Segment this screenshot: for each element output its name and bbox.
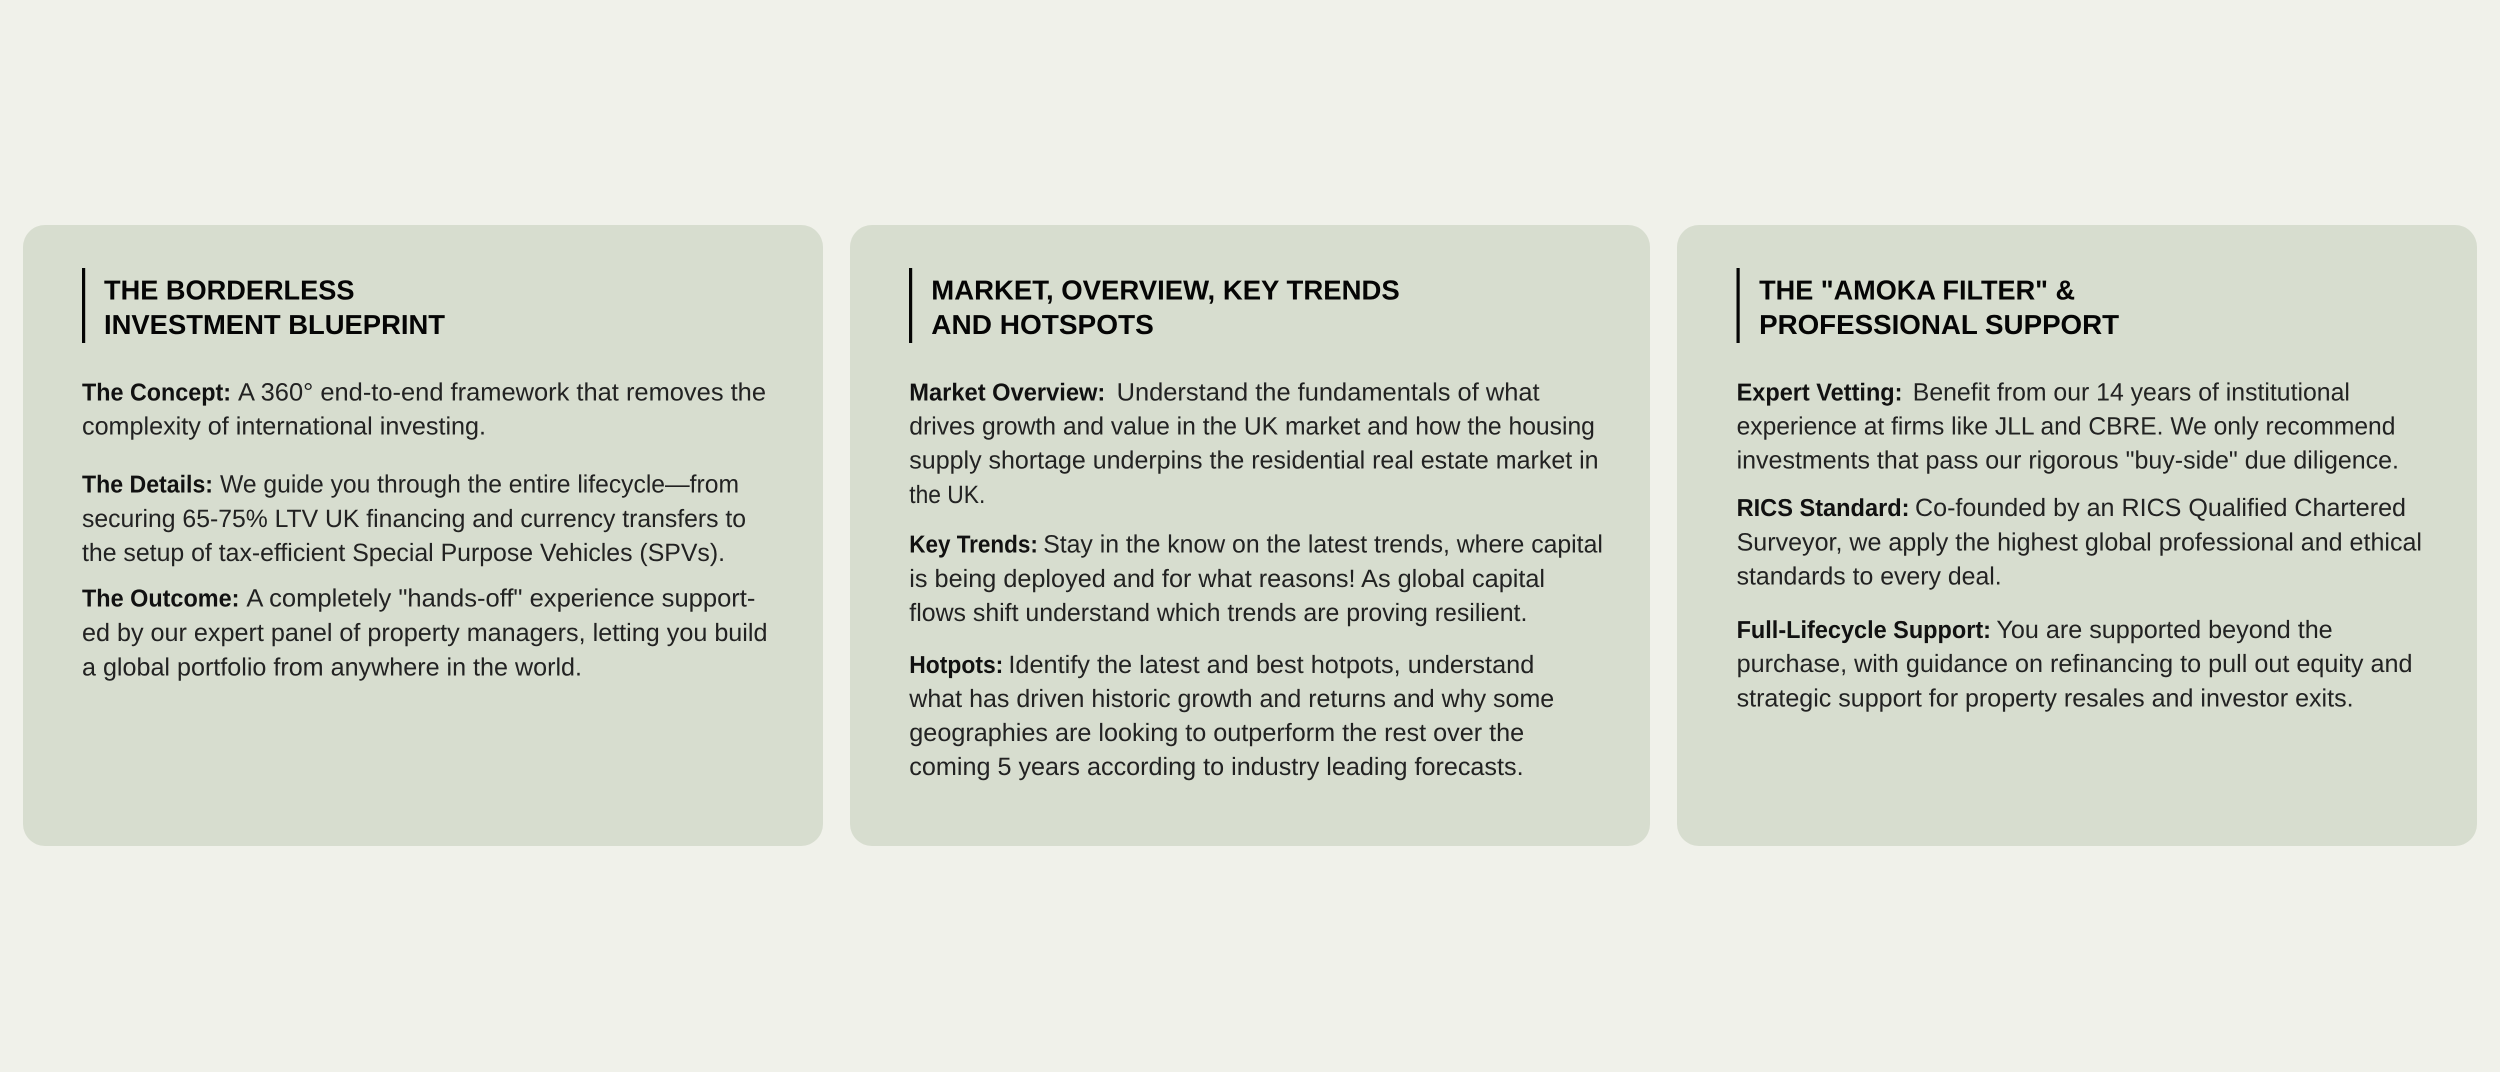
text block: full-lifecycle support: You are supported beyond the — [1996, 616, 2333, 644]
text block: the outcome: The Outcome: — [82, 586, 239, 613]
text block: full-lifecycle support: purchase, with guidance on refinancing to pull out equity and — [1737, 650, 2412, 678]
text block: the details — [82, 471, 746, 567]
text block: hotspots: what has driven historic growth and returns and why some — [908, 685, 1554, 713]
text block: hotspots: coming 5 years according to industry leading forecasts. — [909, 753, 1524, 781]
text block: the outcome: a global portfolio from anywhere in the world. — [82, 653, 582, 681]
text block: market overview: Market Overview: — [909, 379, 1105, 406]
text block: rics standard: standards to every deal. — [1737, 563, 2002, 591]
text block: rics standard — [1737, 494, 2422, 591]
text block: hotspots: geographies are looking to outperform the rest over the — [909, 719, 1524, 747]
text block: key trends: Stay in the know on the latest trends, where capital — [1043, 531, 1603, 559]
text block: the outcome: A completely "hands-off" experience support- — [246, 585, 755, 613]
heading: market, overview, key trends and hotspots: AND HOTSPOTS — [931, 309, 1154, 340]
text block: the concept: The Concept: — [82, 379, 231, 406]
heading: the borderless investment blueprint — [82, 268, 445, 343]
panel: borderless investment blueprint — [23, 225, 823, 846]
text block: hotspots — [908, 651, 1554, 781]
text block: market overview: the UK. — [909, 481, 985, 509]
text block: the details: securing 65-75% LTV UK financing and currency transfers to — [82, 505, 746, 533]
text block: rics standard: RICS Standard: — [1737, 495, 1910, 522]
text block: rics standard: Co-founded by an RICS Qualified Chartered — [1915, 494, 2406, 522]
text block: market overview — [909, 378, 1599, 509]
text block: the details: The Details: — [82, 472, 213, 499]
text block: key trends: flows shift understand which trends are proving resilient. — [909, 599, 1527, 627]
text block: the details: We guide you through the entire lifecycle—from — [220, 471, 739, 499]
text block: the details: the setup of tax-efficient Special Purpose Vehicles (SPVs). — [82, 539, 725, 567]
heading: the borderless investment blueprint: THE BORDERLESS — [104, 275, 354, 306]
text block: market overview: supply shortage underpins the residential real estate market in — [909, 446, 1599, 474]
text block: the concept — [82, 378, 766, 440]
text block: full-lifecycle support: strategic support for property resales and investor exits. — [1737, 684, 2354, 712]
text block: the outcome: ed by our expert panel of property managers, letting you build — [82, 619, 768, 647]
text block: the concept: A 360° end-to-end framework that removes the — [238, 378, 766, 406]
heading: the amoka filter and professional support — [1736, 268, 2119, 343]
heading: the borderless investment blueprint: INVESTMENT BLUEPRINT — [104, 309, 445, 340]
text block: rics standard: Surveyor, we apply the highest global professional and ethical — [1737, 529, 2422, 557]
panel: market overview, key trends and hotspots — [850, 225, 1650, 846]
heading: the amoka filter and professional support: THE "AMOKA FILTER" & — [1759, 275, 2075, 306]
text block: market overview: Understand the fundamentals of what — [1117, 378, 1540, 406]
text block: expert vetting: Benefit from our 14 years of institutional — [1913, 378, 2350, 406]
text block: hotspots: Identify the latest and best hotpots, understand — [1008, 651, 1534, 679]
text block: expert vetting: experience at firms like JLL and CBRE. We only recommend — [1737, 412, 2395, 440]
text block: key trends — [909, 531, 1603, 627]
text block: expert vetting: investments that pass our rigorous "buy-side" due diligence. — [1737, 446, 2399, 474]
heading: market, overview, key trends and hotspots: MARKET, OVERVIEW, KEY TRENDS — [931, 275, 1400, 306]
text block: key trends: is being deployed and for what reasons! As global capital — [909, 565, 1545, 593]
panel: the amoka filter and professional support — [1677, 225, 2477, 846]
text block: the concept: complexity of international investing. — [82, 412, 486, 440]
text block: the outcome — [82, 585, 768, 681]
text block: expert vetting — [1737, 378, 2399, 474]
text block: expert vetting: Expert Vetting: — [1737, 379, 1902, 406]
text block: full-lifecycle support: Full-Lifecycle Support: — [1737, 617, 1991, 644]
heading: market, overview, key trends and hotspots — [909, 268, 1400, 343]
text block: hotspots: Hotpots: — [909, 652, 1003, 679]
heading: the amoka filter and professional support: PROFESSIONAL SUPPORT — [1759, 309, 2119, 340]
text block: market overview: drives growth and value in the UK market and how the housing — [909, 412, 1595, 440]
text block: full-lifecycle support — [1737, 616, 2412, 712]
text block: key trends: Key Trends: — [909, 532, 1038, 559]
